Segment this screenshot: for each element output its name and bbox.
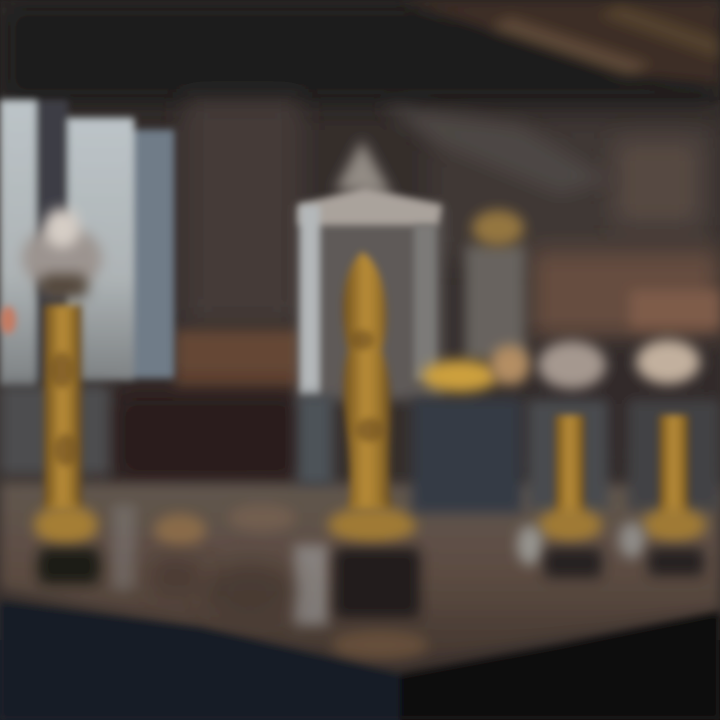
trophy: right pair, right one	[619, 340, 720, 576]
windows: bright panes at left	[0, 100, 174, 475]
table surface	[0, 482, 720, 665]
trophy: distant gold top	[465, 210, 525, 360]
trophy: left	[22, 208, 102, 584]
display block: dark pedestal with gold glow	[412, 345, 530, 513]
trophy: small reflection glow at left edge	[0, 306, 16, 334]
trophy: right pair, left one	[517, 341, 608, 578]
ceiling: warm streaks at top right	[380, 0, 720, 195]
foreground: dark table edge	[0, 602, 720, 720]
trophy: centre in glass case	[297, 140, 443, 618]
